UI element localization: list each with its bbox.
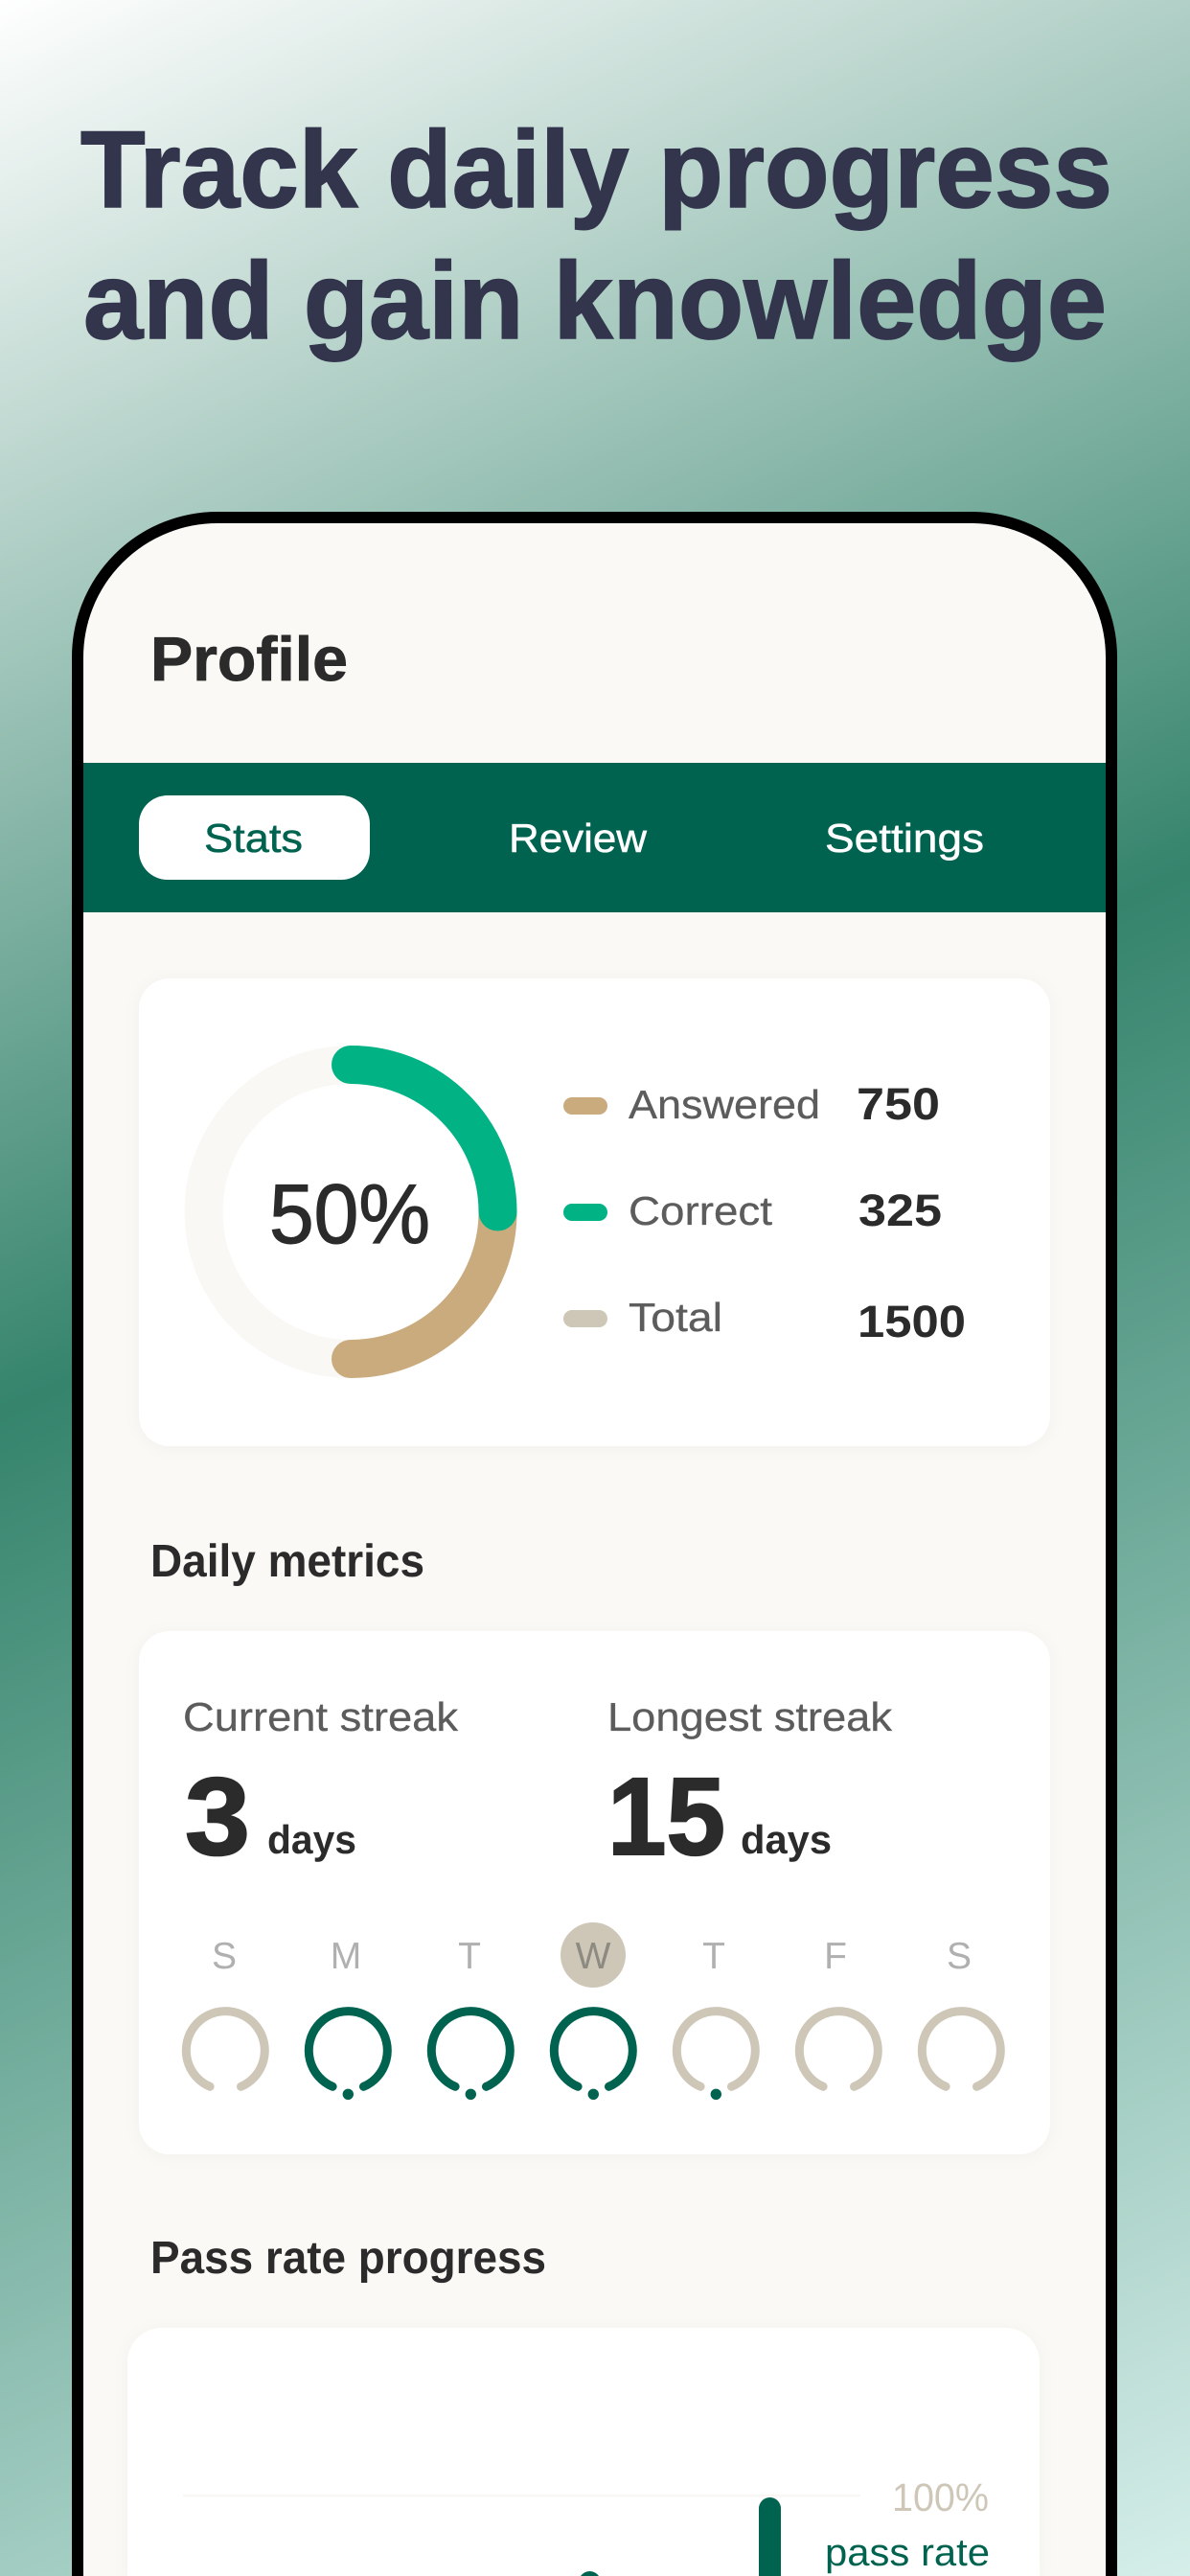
- panel: overall stats: [139, 978, 1050, 1446]
- phone outline: [78, 518, 1111, 2576]
- weekday labels: W: [576, 1936, 611, 1977]
- legend: answered: [563, 1078, 940, 1129]
- weekday labels: S: [212, 1936, 237, 1977]
- panel: daily metrics: [139, 1631, 1050, 2154]
- donut value: 50%: [269, 1166, 430, 1261]
- current streak: Current streak: [183, 1694, 459, 1739]
- completed-day dots: [343, 2089, 721, 2100]
- weekday labels: M: [331, 1936, 361, 1977]
- legend: total: [563, 1295, 966, 1346]
- weekday labels: T: [458, 1936, 481, 1977]
- chart bars: [581, 2497, 781, 2576]
- legend: correct: [563, 1184, 942, 1235]
- weekday labels: F: [824, 1936, 847, 1977]
- current streak: days: [267, 1817, 356, 1862]
- section heading: Daily metrics: Daily metrics: [150, 1536, 424, 1587]
- donut chart: [203, 1065, 498, 1359]
- tab: Stats (active): Stats: [204, 816, 303, 861]
- legend: answered: Answered: [629, 1082, 820, 1127]
- current streak: [183, 1694, 459, 1878]
- tab: Settings: Settings: [825, 816, 984, 861]
- longest streak: Longest streak: [607, 1694, 893, 1739]
- legend: correct: 325: [858, 1184, 942, 1235]
- longest streak: 15: [607, 1756, 725, 1878]
- chart gridline: [183, 2495, 860, 2497]
- axis label: 100%: 100%: [892, 2475, 989, 2519]
- phone mockup: [78, 518, 1111, 2576]
- legend label: pass rate: pass rate: [825, 2532, 990, 2574]
- legend: correct: Correct: [629, 1188, 772, 1233]
- phone frame: [78, 518, 1111, 2576]
- tab bar: [83, 763, 1106, 912]
- section heading: Pass rate progress: Pass rate progress: [150, 2233, 546, 2284]
- weekday labels: [212, 1936, 972, 1977]
- weekly progress rings: [186, 2012, 1000, 2086]
- title: [80, 109, 1112, 362]
- longest streak: [607, 1694, 893, 1878]
- tab: Stats (active): [139, 795, 370, 880]
- title: Track daily progress: [80, 109, 1112, 231]
- longest streak: days: [741, 1817, 832, 1862]
- weekday labels: S: [947, 1936, 972, 1977]
- tab: Review: Review: [509, 816, 648, 861]
- title: and gain knowledge: [83, 241, 1107, 362]
- screen heading: Profile: Profile: [150, 624, 348, 694]
- current streak: 3: [185, 1756, 250, 1878]
- legend: total: Total: [629, 1295, 722, 1340]
- legend: answered: 750: [857, 1078, 940, 1129]
- today highlight: [561, 1922, 626, 1988]
- panel: pass rate chart: [127, 2328, 1040, 2576]
- legend: total: 1500: [858, 1296, 966, 1346]
- weekday labels: T: [702, 1936, 725, 1977]
